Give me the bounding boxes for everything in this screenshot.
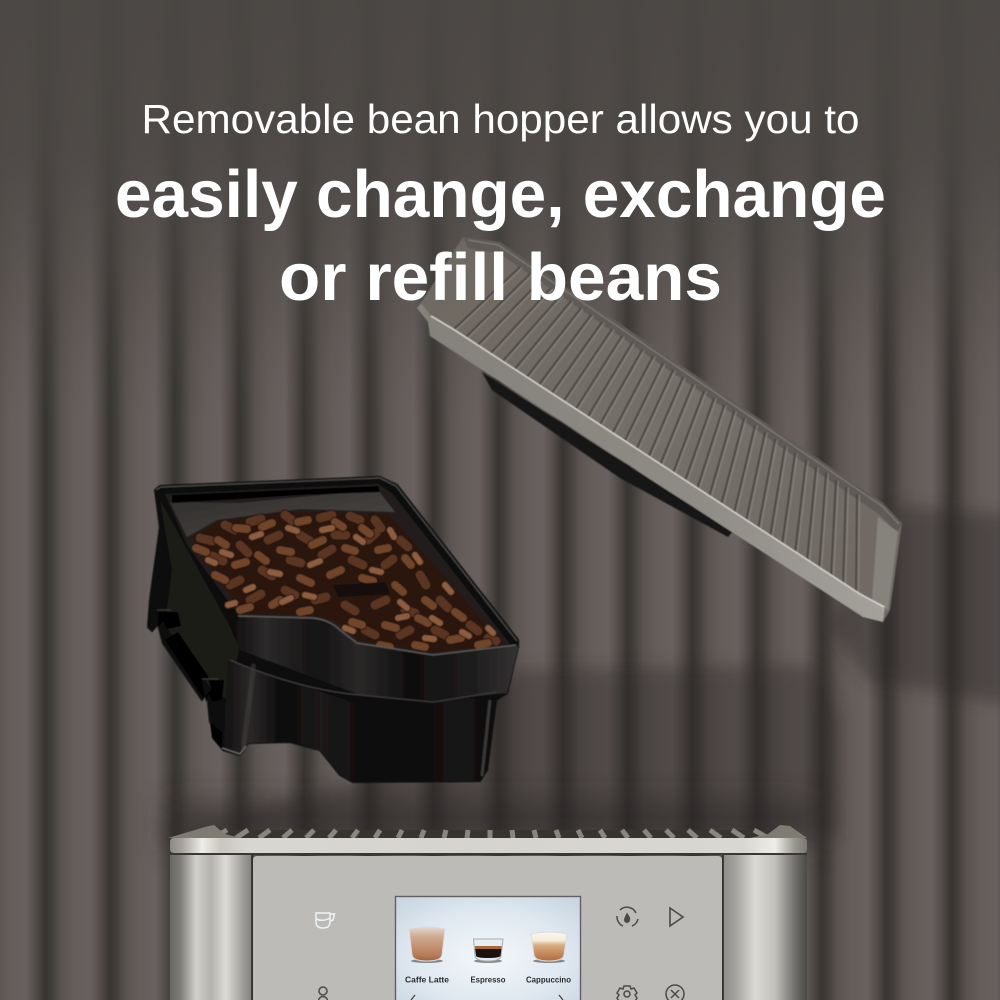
intro line: Removable bean hopper allows you to	[142, 96, 860, 142]
lid back edge	[463, 237, 902, 533]
drink: espresso: Espresso	[470, 975, 506, 985]
hopper: black bean container	[148, 477, 518, 782]
lid body	[417, 237, 902, 622]
icon: cup	[316, 913, 334, 928]
lid right edge	[872, 517, 898, 610]
lid front lip	[417, 303, 885, 622]
hopper interior	[165, 484, 510, 655]
drink: cappuccino	[526, 932, 571, 985]
hopper rim	[155, 477, 518, 662]
headline: easily change, exchange	[115, 157, 886, 232]
drink: espresso	[470, 939, 506, 985]
hopper outer body	[148, 477, 518, 782]
machine right side panel	[723, 855, 807, 1000]
hopper latch	[333, 582, 390, 597]
icon: person	[318, 987, 328, 1000]
drink: cappuccino: Cappuccino	[526, 975, 571, 985]
lid: removed hopper cover	[417, 237, 902, 622]
lid ribs	[453, 267, 859, 594]
drink: caffe latte	[405, 927, 449, 985]
icon: settings gear	[617, 986, 637, 1000]
hopper side wall	[160, 500, 240, 700]
hopper lower body	[223, 660, 495, 782]
headline	[115, 157, 886, 315]
hopper interior reflection	[170, 490, 395, 537]
hopper front rim	[231, 617, 518, 700]
machine left side panel	[170, 855, 252, 1000]
icon: rinse cycle	[617, 907, 638, 926]
coffee beans	[192, 512, 504, 652]
icon: cancel	[666, 985, 684, 1000]
screen arrows	[411, 995, 563, 1000]
touch screen	[396, 896, 580, 1000]
drink: caffe latte: Caffe Latte	[405, 975, 449, 985]
machine top grating	[168, 825, 807, 838]
machine top bar	[170, 838, 807, 853]
machine front panel	[253, 856, 722, 1000]
headline: or refill beans	[279, 240, 722, 315]
lid underside shadow	[482, 372, 732, 537]
hopper clips	[158, 612, 224, 750]
coffee machine	[168, 825, 807, 1000]
icon: play	[670, 908, 683, 926]
